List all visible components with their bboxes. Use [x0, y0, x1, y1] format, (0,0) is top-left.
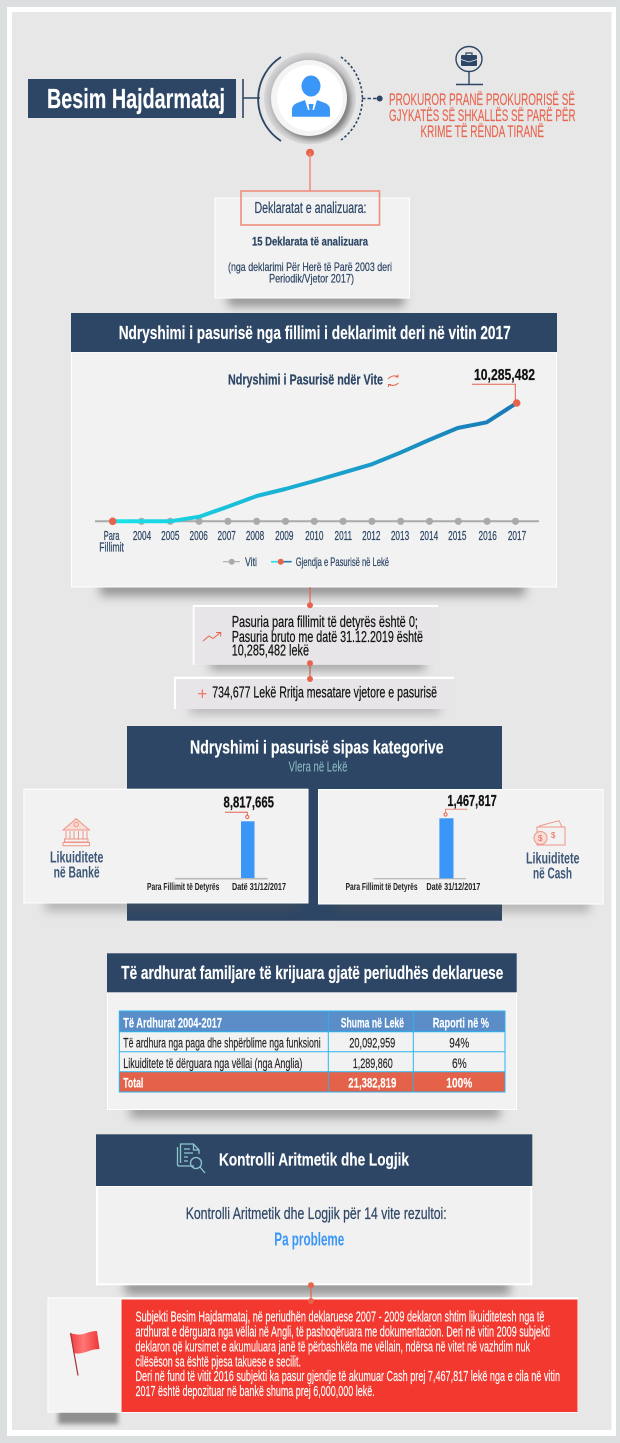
bar chart: bank: Datë 31/12/2017 [232, 882, 286, 893]
heading: wealth by category: Vlera në Lekë [289, 760, 348, 776]
line chart: 2015 [448, 529, 466, 543]
panel: declarations: Periodik/Vjetor 2017) [269, 272, 354, 286]
card: bank liquidity: Likuiditete [50, 850, 103, 867]
role text: KRIME TË RËNDA TIRANË [420, 123, 544, 141]
connector dots [307, 602, 313, 682]
panel: red flag note [48, 1297, 578, 1424]
line chart: 2012 [362, 529, 380, 543]
chart legend [223, 555, 389, 569]
line chart: 2016 [479, 529, 497, 543]
icon: cash: $ [538, 834, 543, 843]
icon: refresh [388, 374, 398, 387]
connector: chart to summary [309, 587, 311, 679]
heading: family income [107, 953, 517, 992]
panel: arithmetic and logic check [96, 1134, 532, 1295]
panel: arithmetic and logic check: Kontrolli Aritmetik dhe Logjik për 14 vite rezultoi: [186, 1204, 447, 1223]
bar chart: cash: Para Fillimit të Detyrës [346, 882, 418, 893]
line chart: 2013 [391, 529, 409, 543]
bar chart: cash [346, 793, 497, 893]
chart legend: Viti [245, 555, 257, 569]
panel: declarations: 15 Deklarata të analizuara [252, 237, 368, 249]
icon: document with magnifier [178, 1144, 205, 1173]
line chart: 2006 [190, 529, 208, 543]
bar chart: bank: 8,817,665 [224, 795, 274, 812]
card: cash liquidity: Likuiditete [526, 850, 580, 867]
role text [389, 91, 576, 141]
panel: average yearly growth [174, 677, 454, 713]
bar chart: cash: 1,467,817 [447, 793, 497, 810]
income table: Raporti në % [433, 1016, 489, 1031]
heading: family income: Të ardhurat familjare të krijuara gjatë periudhës deklaruese [121, 963, 503, 983]
panel: family income [107, 953, 517, 1118]
icon: cash: $ [551, 831, 556, 840]
income table [119, 1011, 505, 1092]
panel: red flag note: cilësëson sa është pjesa takuese e secilit. [136, 1355, 301, 1371]
card: bank liquidity: në Bankë [54, 864, 100, 881]
heading: arithmetic and logic check: Kontrolli Aritmetik dhe Logjik [219, 1150, 409, 1170]
card: cash liquidity: në Cash [533, 866, 572, 883]
heading: wealth by category [190, 737, 444, 776]
income table: Shuma në Lekë [341, 1016, 404, 1031]
card: bank liquidity [24, 789, 308, 911]
icon: plus [198, 690, 206, 698]
panel: wealth summary: 10,285,482 lekë [232, 642, 309, 659]
card: cash liquidity [318, 790, 603, 912]
panel: declarations: Deklaratat e analizuara: [254, 200, 366, 217]
line chart: 2010 [305, 529, 323, 543]
bar chart: bank: Para Fillimit të Detyrës [147, 882, 220, 893]
connector: portrait to role [362, 96, 383, 102]
heading: arithmetic and logic check [96, 1134, 532, 1186]
line chart: 2004 [133, 529, 151, 543]
panel: red flag note: 2017 është depozituar në bankë shuma prej 6,000,000 lekë. [136, 1384, 375, 1400]
heading: wealth change [71, 313, 557, 352]
bar chart: bank [147, 795, 286, 893]
panel: arithmetic and logic check: Pa probleme [274, 1230, 344, 1250]
bar chart: cash: Datë 31/12/2017 [426, 882, 481, 893]
income table: 6% [452, 1056, 467, 1071]
panel: wealth by category [24, 726, 603, 921]
connector: portrait to declarations [306, 149, 314, 191]
panel: wealth summary: Pasuria bruto me datë 31.12.2019 është [232, 629, 423, 646]
income table: 1,289,860 [353, 1056, 393, 1071]
line chart: 2005 [161, 529, 179, 543]
chart legend: Gjendja e Pasurisë në Lekë [296, 555, 389, 569]
panel: declarations: (nga deklarimi Për Herë të Parë 2003 deri [228, 260, 392, 274]
line chart: 2008 [246, 529, 264, 543]
panel: average yearly growth: 734,677 Lekë Rritja mesatare vjetore e pasurisë [212, 685, 437, 702]
icon: bank [63, 819, 90, 846]
panel: wealth change over years [71, 313, 557, 596]
income table: Të Ardhurat 2004-2017 [123, 1016, 222, 1031]
connector: name to portrait [243, 79, 260, 118]
icon: briefcase [456, 46, 483, 84]
line chart: Fillimit [99, 540, 124, 554]
name banner [28, 79, 236, 118]
income table: Të ardhura nga paga dhe shpërblime nga funksioni [123, 1036, 321, 1051]
line chart: 2011 [335, 529, 352, 543]
income table: 20,092,959 [349, 1036, 395, 1051]
line chart: 2009 [275, 529, 293, 543]
line chart: Para [104, 529, 119, 543]
income table: 94% [449, 1036, 469, 1051]
heading: wealth by category: Ndryshimi i pasurisë sipas kategorive [190, 737, 444, 757]
panel: wealth summary [193, 605, 438, 670]
line chart: 2017 [508, 529, 526, 543]
name banner: Besim Hajdarmataj [47, 83, 225, 114]
icon: red flag [70, 1331, 100, 1376]
line chart: 2007 [218, 529, 236, 543]
line chart: 10,285,482 [474, 367, 535, 384]
panel: declarations [215, 191, 410, 306]
income table: Total [123, 1076, 143, 1091]
income table: Likuiditete të dërguara nga vëllai (nga Anglia) [123, 1056, 302, 1071]
income table: 100% [446, 1076, 472, 1091]
icon: person [292, 76, 330, 117]
line chart: 2014 [420, 529, 438, 543]
connector: check to red flag note [308, 1282, 314, 1304]
portrait medallion [258, 52, 362, 144]
income table: 21,382,819 [348, 1076, 396, 1091]
icon: trend arrow [203, 632, 221, 641]
panel: wealth summary: Pasuria para fillimit të detyrës është 0; [232, 614, 418, 631]
line chart [95, 367, 539, 554]
icon: cash [534, 821, 565, 845]
chart title: Ndryshimi i Pasurisë ndër Vite [228, 372, 383, 389]
